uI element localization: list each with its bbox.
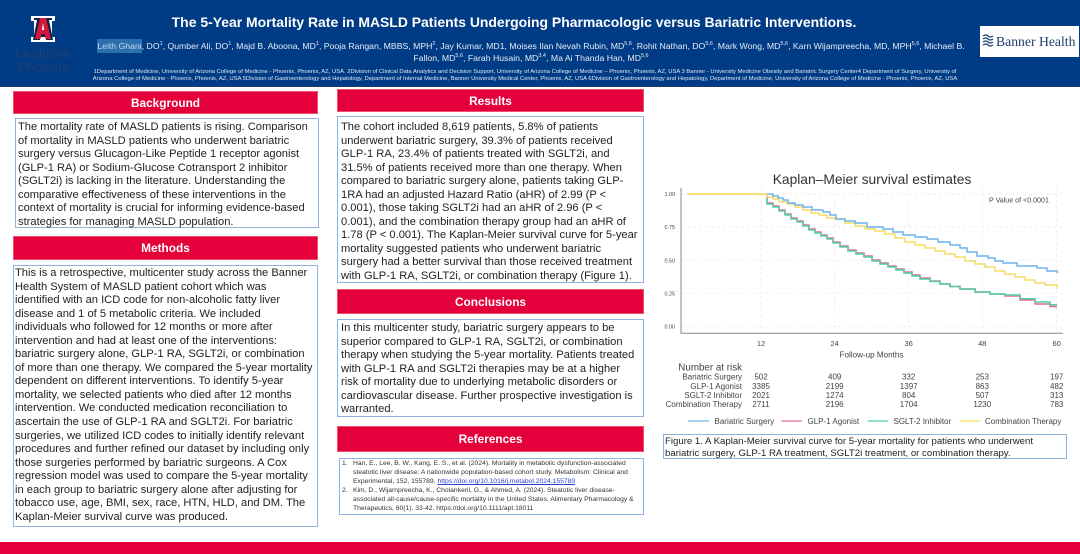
row labels: SGLT-2 Inhibitor (684, 391, 742, 400)
reference 2: Therapeutics, 60(1), 33-42. https://doi.org/10.1111/apt.18011 (353, 505, 533, 512)
y axis labels (664, 192, 675, 331)
panel: Methods text: identified with an ICD code for non-alcoholic fatty liver (15, 294, 280, 306)
panel: Conclusions text: therapy when studying the 5-year mortality. Patients treated (341, 349, 634, 361)
row values (752, 372, 1064, 409)
row values: 197 (1050, 372, 1064, 382)
row values: 1274 (826, 391, 844, 400)
panel: Methods text: regression model was used to compare the 5-year mortality (15, 470, 308, 482)
row values: 253 (976, 372, 990, 382)
figure caption: Figure 1. A Kaplan-Meier survival curve for 5-year mortality for patients who underwent (665, 436, 1033, 447)
panel: Conclusions text: with GLP-1 RA and SGLT2i therapies may be at a higher (341, 363, 620, 375)
panel: Background text (15, 118, 319, 228)
panel heading: Methods: Methods (141, 241, 190, 255)
reference 1: steatotic liver disease: A nationwide population-based cohort study. Metabolism: Clinical and (353, 469, 628, 476)
authors: Leith Ghani, DO1, Qumber Ali, DO1, Majd B. Aboona, MD1, Pooja Rangan, MBBS, MPH2, Jay Kumar, MD1, Moises Ilan Nevah Rubin, MD5,6, Rohit Nathan, DO5,6, Mark Wong, MD5,6, Karn Wijampreecha, MD, MPH5,6, Michael B. (97, 41, 965, 51)
row values: 2021 (752, 391, 770, 400)
reference 2: Kim, D., Wijarnpreecha, K., Cholankeril, G., & Ahmed, A. (2024). Steatotic liver disease- (353, 487, 615, 494)
row values: 804 (902, 391, 916, 400)
reference 2 (342, 487, 634, 512)
header banner (0, 0, 1080, 87)
row labels: Bariatric Surgery (682, 372, 742, 382)
chart axes (681, 188, 1063, 333)
chart legend: Combination Therapy (985, 417, 1061, 426)
panel: Results text: 0.001), those taking SGLT2i had an aHR of 2.96 (P < (341, 202, 602, 214)
panel: Results text: GLP-1 RA, 23.4% of patients treated with SGLT2i, and (341, 148, 610, 160)
reference 1: Experimental, 152, 155789. https://doi.org/10.1016/j.metabol.2024.155789 (353, 478, 575, 485)
panel: Results text: 31.5% of patients received more than one therapy. When (341, 162, 622, 174)
panel: Methods text: disease and 1 of 5 metabolic criteria. We included (15, 308, 261, 320)
curve: Bariatric Surgery (767, 194, 1057, 273)
panel: Results text: 1RA had an adjusted Hazard Ratio (aHR) of 2.99 (P < (341, 189, 606, 201)
panel: Results text: with GLP-1 RA, SGLT2i, or combination therapy (Figure 1). (341, 270, 632, 282)
panel: Results text: surgery had a better survival than those received treatment (341, 256, 632, 268)
curve: GLP-1 Agonist (767, 196, 1057, 306)
panel: Methods text: This is a retrospective, multicenter study across the Banner (15, 267, 307, 279)
row values: 3385 (752, 382, 770, 391)
panel: Methods text: bariatric surgery alone, GLP-1 RA, SGLT2i, or combination (15, 348, 305, 360)
panel: Conclusions text: risk of mortality due to underlying metabolic disorders or (341, 376, 617, 388)
chart legend (688, 417, 1061, 426)
panel: Methods text: individuals who followed for 12 months or more after (15, 321, 273, 333)
panel heading: Methods (13, 236, 318, 260)
panel: Results text: The cohort included 8,619 patients, 5.8% of patients (341, 121, 598, 133)
curve: Combination Therapy (767, 194, 1057, 289)
affiliations: 1Department of Medicine, University of Arizona College of Medicine - Phoenix, Phoenix, AZ, USA. 2Division of Clinical Data Analytics and Decision Support, University of Arizona College of Medicine – Phoenix, Phoenix, AZ, USA 3 Banner - University Medicine Obesity and Bariatric Surgery Center4 Department of Surgery, University of (94, 69, 956, 75)
affiliations: Arizona College of Medicine - Phoenix, Phoenix, AZ, USA 5Division of Gastroenterology and Hepatology, Department of Internal Medicine, Banner University Medical Center, Phoenix, AZ, USA 6Division of Gastroenterology and Hepatology, Department of Medicine, University of Arizona College of Medicine - Phoenix, Phoenix, AZ, USA (93, 76, 957, 82)
panel heading: Results (337, 89, 644, 112)
panel: Methods text: Kaplan-Meier survival curve was produced. (15, 511, 228, 523)
panel: Background text: (GLP-1 RA) or Sodium-Glucose Cotransport 2 inhibitor (18, 162, 287, 174)
row values: 1397 (900, 382, 918, 391)
curve: common start segment (687, 193, 767, 195)
number at risk table (666, 362, 1064, 409)
row values: 783 (1050, 400, 1064, 409)
panel: Conclusions text: cardiovascular disease. Further prospective investigation is (341, 390, 633, 402)
panel heading: References: References (459, 432, 522, 446)
footer bar (0, 542, 1080, 554)
panel: Conclusions text (337, 319, 644, 417)
panel heading: Background: Background (131, 96, 200, 110)
figure caption: bariatric surgery, GLP-1 RA treatment, SGLT2i treatment, or combination therapy. (665, 448, 1011, 458)
logo text: Medicine Phoenix (15, 45, 71, 74)
row values: 2199 (826, 382, 844, 391)
row labels: Combination Therapy (666, 400, 742, 409)
panel: Methods text: in each group to bariatric surgery alone after adjusting for (15, 484, 297, 496)
panel heading: Background (13, 91, 318, 114)
row values: 332 (902, 372, 916, 382)
row values: 1230 (973, 400, 992, 409)
curve: SGLT-2 Inhibitor (767, 198, 1057, 305)
reference 2: 2. (342, 487, 348, 494)
figure caption (663, 434, 1067, 459)
panel: Conclusions text: warranted. (341, 403, 394, 415)
panel: Background text: (SGLT2i) is lacking in the literature. Understanding the (18, 175, 285, 187)
row values: 409 (828, 372, 842, 382)
row values: 313 (1050, 391, 1064, 400)
x axis labels: 48 (978, 339, 986, 348)
icon: university A logo (31, 16, 55, 42)
panel: Methods text: ascertain the use of GLP-1 RA and SGLT2i. For bariatric (15, 416, 293, 428)
row labels: GLP-1 Agonist (690, 382, 743, 391)
panel: Results text: mortality suggested patients who underwent bariatric (341, 243, 601, 255)
annotation: p value: P Value of <0.0001 (989, 196, 1049, 204)
reference 1 (342, 460, 628, 485)
panel: Results text: 0.001), and the combination therapy group had an aHR of (341, 216, 626, 228)
panel: Background text: of mortality in MASLD patients who underwent bariatric (18, 135, 289, 147)
panel: Methods text: of more than one therapy. We compared the 5-year mortality (15, 362, 312, 374)
panel: Methods text: intervention. We conducted medication reconciliation to (15, 402, 287, 414)
row values: 2711 (752, 400, 770, 409)
authors (97, 39, 965, 63)
table title: Number at risk (678, 362, 742, 374)
panel heading: References (337, 426, 644, 452)
logo text: Medicine Phoenix: Medicine (15, 45, 71, 61)
panel: Results text (337, 116, 644, 283)
row values: 1704 (900, 400, 918, 409)
panel: Methods text: Health System of MASLD patient cohort which was (15, 281, 266, 293)
row values: 507 (976, 391, 990, 400)
y axis labels: 0.50 (664, 258, 675, 264)
logo text: Medicine Phoenix: Phoenix (18, 58, 68, 74)
y axis labels: 0.25 (664, 291, 675, 297)
panel: Results text: 1.78 (P < 0.001). The Kaplan-Meier survival curve for 5-year (341, 229, 638, 241)
x axis labels: 36 (905, 339, 913, 348)
reference 1: 1. (342, 460, 348, 467)
panel: Background text: surgery versus Glucagon-Like Peptide 1 receptor agonist (18, 148, 299, 160)
chart title: Kaplan–Meier survival estimates (773, 172, 971, 187)
panel: Conclusions text: superior compared to GLP-1 RA, SGLT2i, or combination (341, 336, 623, 348)
panel: Results text: underwent bariatric surgery, 39.3% of patients received (341, 135, 613, 147)
panel heading: Conclusions: Conclusions (455, 295, 526, 309)
panel: Methods text: surgeries, we utilized ICD codes to initially identify relevant (15, 430, 304, 442)
panel: Background text: comparative effectiveness of these interventions in the (18, 189, 286, 201)
reference 2: associated all-cause/cause-specific mortality in the United States. Alimentary Pharmacology & (353, 496, 634, 503)
title: The 5-Year Mortality Rate in MASLD Patients Undergoing Pharmacologic versus Bariatric Interventions. (172, 14, 856, 30)
panel: Conclusions text: In this multicenter study, bariatric surgery appears to be (341, 322, 614, 334)
panel heading: Conclusions (337, 289, 644, 314)
chart legend: SGLT-2 Inhibitor (894, 417, 951, 426)
logo: Banner Health (980, 26, 1079, 57)
panel heading: Results: Results (469, 94, 512, 108)
row labels (666, 372, 743, 409)
chart: Kaplan-Meier survival estimates (664, 172, 1064, 426)
row values: 502 (754, 372, 768, 382)
panel: Methods text: mortality, we selected patients who died after 12 months (15, 389, 292, 401)
row values: 2196 (826, 400, 844, 409)
x axis labels: 12 (757, 339, 765, 348)
y axis labels: 1.00 (664, 192, 675, 198)
panel: Methods text: dependent on different interventions. To identify 5-year (15, 375, 283, 387)
affiliations (92, 69, 958, 82)
chart legend: GLP-1 Agonist (808, 417, 860, 426)
chart legend: Bariatric Surgery (714, 417, 774, 426)
x axis labels (757, 339, 1061, 348)
y axis labels: 0.75 (664, 225, 675, 231)
logo wordmark: Banner Health (996, 34, 1075, 49)
authors: Fallon, MD5,6, Farah Husain, MD3,4, Ma Ai Thanda Han, MD5,6 (413, 53, 649, 63)
panel: Methods text: those surgeries performed by bariatric surgeons. A Cox (15, 457, 287, 469)
panel: Methods text: procedures and further refined our dataset by including only (15, 443, 309, 455)
panel: Methods text (13, 265, 318, 527)
panel: Results text: compared to bariatric surgery alone, patients taking GLP- (341, 175, 623, 187)
panel: Background text: strategies for managing MASLD population. (18, 216, 234, 228)
panel: Background text: The mortality rate of MASLD patients is rising. Comparison (18, 121, 308, 133)
panel: Methods text: intervention and had at least one of the interventions: (15, 335, 277, 347)
panel: Methods text: tobacco use, age, BMI, sex, race, HTN, HLD, and DM. The (15, 497, 305, 509)
reference 1: Han, E., Lee, B. W., Kang, E. S., et al. (2024). Mortality in metabolic dysfunction-associated (353, 460, 626, 467)
row values: 863 (976, 382, 990, 391)
x axis labels: 24 (831, 339, 839, 348)
x axis title: Follow-up Months (840, 350, 903, 360)
row values: 482 (1050, 382, 1064, 391)
x axis labels: 60 (1053, 339, 1061, 348)
y axis labels: 0.00 (664, 325, 675, 331)
panel: Background text: context of mortality is crucial for informing evidence-based (18, 202, 305, 214)
panel: References list (339, 458, 644, 515)
icon: Banner waves (982, 34, 994, 47)
